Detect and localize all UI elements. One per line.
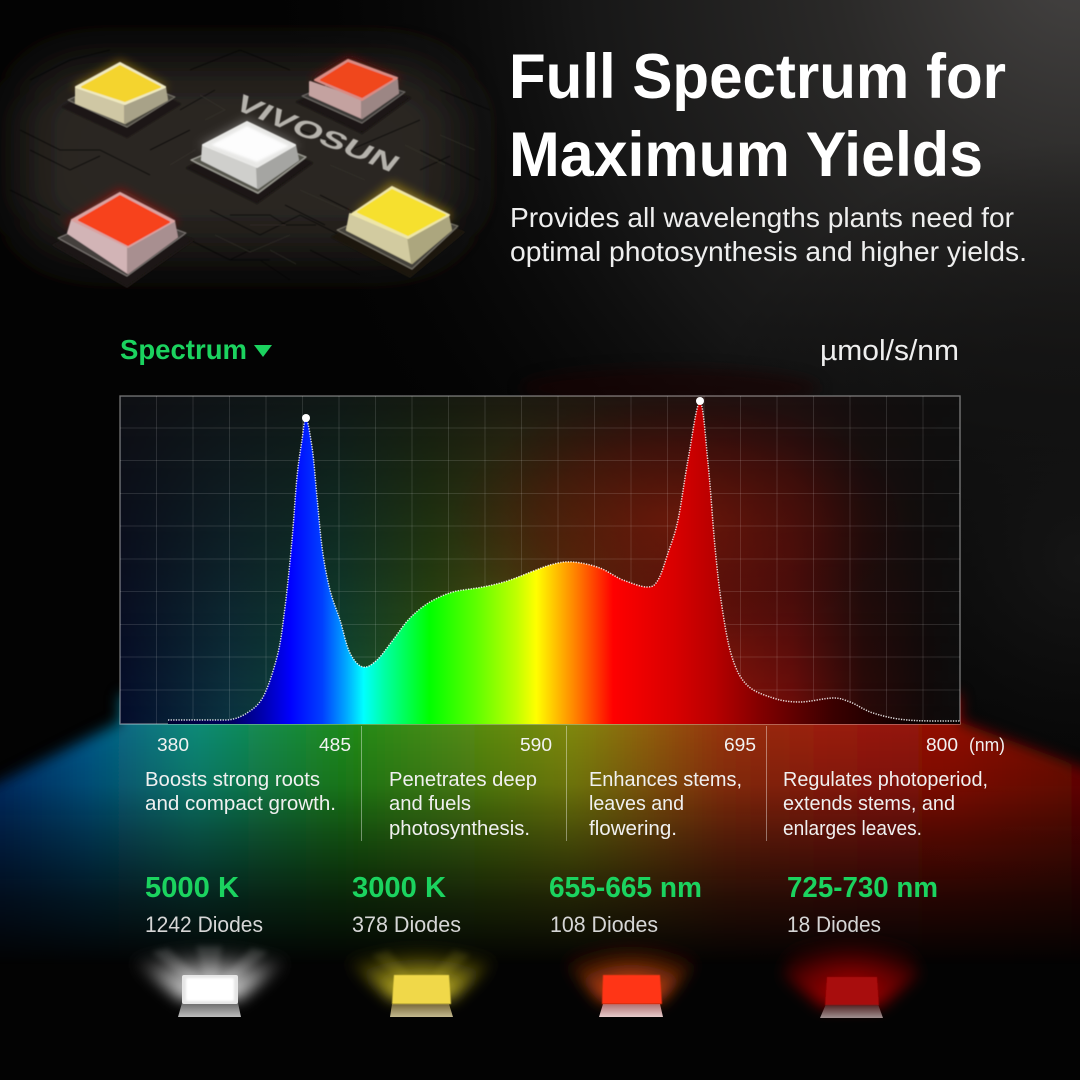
heading: Maximum Yields xyxy=(509,120,983,190)
band description: far red: Regulates photoperiod, xyxy=(783,769,988,791)
band description: green xyxy=(389,769,537,840)
axis labels xyxy=(157,735,1005,755)
band description: far red xyxy=(783,769,988,840)
band description: far red: extends stems, and xyxy=(783,793,955,815)
band description: red: Enhances stems, xyxy=(589,769,742,791)
stat: 725-730 nm: 725-730 nm xyxy=(787,872,938,904)
chip: white centre xyxy=(187,118,312,203)
axis labels: 485 xyxy=(319,735,351,755)
band description: green: and fuels xyxy=(389,793,471,815)
circuit traces xyxy=(10,50,490,280)
chip: red bottom-left xyxy=(53,188,193,287)
stat: 5000 K xyxy=(145,872,263,937)
spectrum colour glow xyxy=(120,396,960,724)
stat: 3000 K: 3000 K xyxy=(352,872,446,904)
axis labels: (nm) xyxy=(969,735,1005,755)
chip: yellow bottom-right xyxy=(332,182,464,277)
red ambient glow xyxy=(450,395,910,645)
band description: blue: Boosts strong roots xyxy=(145,769,320,791)
subheading: Provides all wavelengths plants need for xyxy=(510,202,1014,233)
stat: 5000 K: 5000 K xyxy=(145,872,239,904)
axis labels: 590 xyxy=(520,735,552,755)
red glow above chart xyxy=(520,368,820,408)
stat: 725-730 nm: 18 Diodes xyxy=(787,912,881,937)
light fan below chart xyxy=(0,688,1080,948)
icon: red 655-665nm diode xyxy=(566,932,696,1017)
subheading xyxy=(510,202,1027,267)
band description: red xyxy=(589,769,742,840)
axis labels: 380 xyxy=(157,735,189,755)
plot frame xyxy=(120,396,960,724)
dotted curve outline xyxy=(168,402,960,721)
heading xyxy=(509,42,1006,190)
band description: blue: and compact growth. xyxy=(145,793,336,815)
icon: yellow 3000K diode xyxy=(346,936,496,1017)
band description: red: flowering. xyxy=(589,818,677,840)
axis labels: 695 xyxy=(724,735,756,755)
stat: 5000 K: 1242 Diodes xyxy=(145,912,263,937)
band description: blue xyxy=(145,769,336,815)
logo: VIVOSUN: VIVOSUN xyxy=(228,91,405,177)
icon: white 5000K diode xyxy=(132,936,288,1017)
unit label: µmol/s/nm xyxy=(820,335,959,367)
photo: LED chips on circuit board xyxy=(10,50,490,287)
grid xyxy=(120,396,960,724)
peak marker: blue xyxy=(302,414,310,422)
chart: light spectrum xyxy=(120,395,960,724)
icon: far-red 725-730nm diode xyxy=(782,932,920,1018)
spectrum label: Spectrum xyxy=(120,334,247,365)
band description: far red: enlarges leaves. xyxy=(783,818,922,840)
stat: 655-665 nm: 108 Diodes xyxy=(550,912,658,937)
stat: 3000 K: 378 Diodes xyxy=(352,912,461,937)
circuit board surface xyxy=(20,62,460,252)
stat: 655-665 nm: 655-665 nm xyxy=(549,872,702,904)
band description: green: Penetrates deep xyxy=(389,769,537,791)
subheading: optimal photosynthesis and higher yields. xyxy=(510,236,1027,267)
spectrum curve fill xyxy=(168,402,960,724)
axis labels: 800 xyxy=(926,735,958,755)
band description: red: leaves and xyxy=(589,793,684,815)
stat: 3000 K xyxy=(352,872,461,937)
peak marker: red xyxy=(696,397,704,405)
chip: yellow top-left xyxy=(63,60,180,137)
heading: Full Spectrum for xyxy=(509,42,1006,112)
band description: green: photosynthesis. xyxy=(389,818,530,840)
chip: red top-right xyxy=(297,56,410,133)
stat: 725-730 nm xyxy=(787,872,938,937)
stat: 655-665 nm xyxy=(549,872,702,937)
plot background xyxy=(120,396,960,724)
